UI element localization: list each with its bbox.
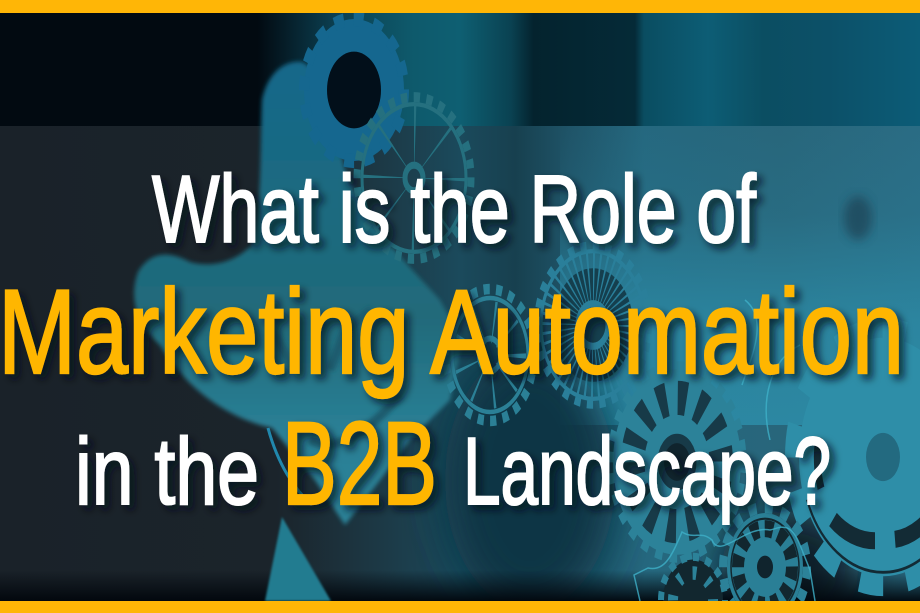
gear: large blue gear (304, 19, 404, 161)
title line 3: B2B: B2B (282, 398, 437, 530)
top yellow bar (0, 0, 920, 13)
gear slots (833, 502, 920, 541)
gear: large solid gear far right (795, 332, 920, 582)
gear: lower dark gear (723, 507, 807, 613)
hand knuckle shading (270, 310, 400, 444)
title (0, 156, 904, 530)
title line 3: in the: in the (75, 419, 259, 525)
background: middle translucent band (0, 125, 920, 613)
gear: bottom small gear (661, 557, 725, 613)
gear: big ring gear centre (611, 366, 743, 558)
bottom yellow bar (0, 601, 920, 613)
gear: thin spoked gear behind finger (357, 97, 471, 259)
thin cyan gear outlines (634, 300, 815, 601)
shirt cuff arc (268, 428, 312, 505)
hand pointing at gear (134, 62, 462, 601)
shirt sleeve (265, 517, 331, 601)
gear: spoked gear mid right of hand (537, 245, 649, 405)
background: top dark band (0, 13, 920, 133)
gear: small gear on hand (446, 289, 534, 421)
